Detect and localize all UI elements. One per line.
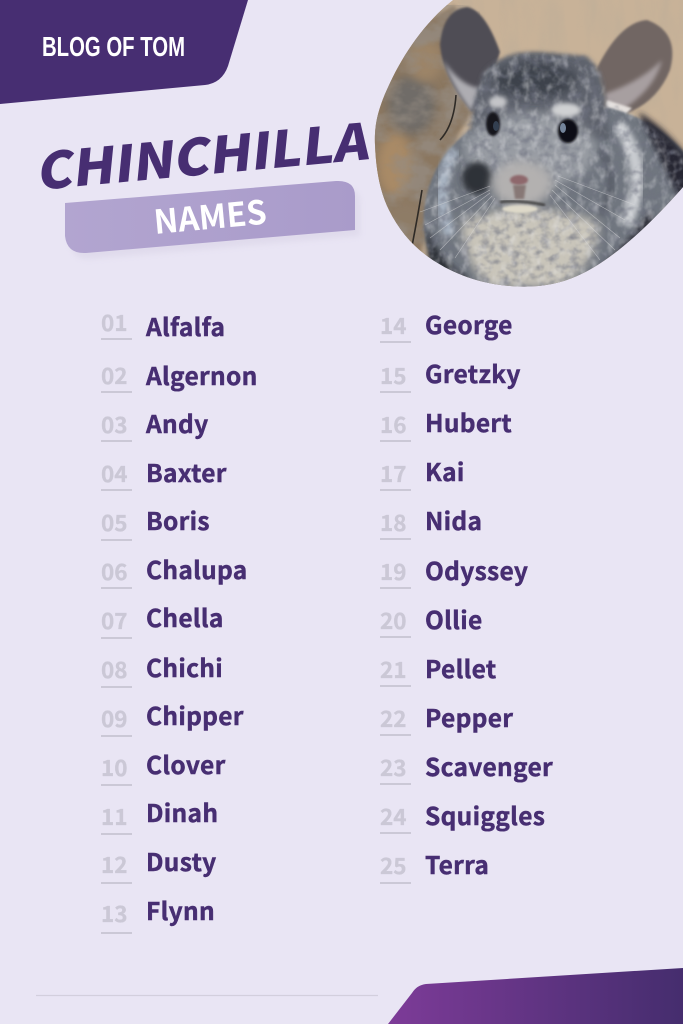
row 15: 15 — [380, 359, 407, 391]
row 12 — [101, 844, 217, 883]
shoulder shadows — [638, 112, 683, 205]
rock on left — [374, 4, 472, 253]
row 10: 10 — [101, 751, 128, 783]
row 07: 07 — [101, 604, 128, 636]
row 13: 13 — [101, 897, 128, 929]
row 04 — [101, 455, 227, 490]
nose and mouth — [500, 175, 545, 213]
row 12: Dusty — [146, 844, 217, 879]
row 11: 11 — [101, 800, 128, 832]
cheek rings — [618, 125, 637, 225]
row 03: Andy — [145, 406, 208, 441]
row 21: Pellet — [425, 651, 496, 686]
row 04: 04 — [101, 457, 128, 489]
row 18: 18 — [380, 506, 407, 538]
row 22 — [380, 700, 513, 735]
row 10 — [101, 747, 226, 785]
row 06: 06 — [101, 555, 128, 587]
row 02: 02 — [101, 359, 128, 391]
row 05: Boris — [146, 503, 210, 538]
row 17 — [380, 454, 465, 490]
row 24: 24 — [380, 800, 407, 832]
row 04: Baxter — [146, 455, 227, 490]
footer banner — [388, 968, 683, 1024]
row 13: Flynn — [146, 893, 215, 928]
row 19: Odyssey — [425, 553, 528, 588]
row 15 — [380, 356, 521, 392]
fur texture — [420, 50, 683, 290]
row 19 — [380, 553, 528, 588]
row 07: Chella — [146, 600, 224, 635]
row 09: Chipper — [146, 698, 244, 733]
eyes — [486, 112, 578, 143]
row 25: 25 — [380, 849, 407, 881]
row 20: Ollie — [425, 602, 482, 637]
body and head — [424, 52, 683, 292]
row 13 — [101, 893, 215, 933]
title: chinchilla: CHINCHILLA — [35, 100, 375, 205]
row 21: 21 — [380, 653, 407, 685]
row 03: 03 — [101, 408, 128, 440]
header banner — [0, 0, 248, 104]
names list: right column — [380, 307, 553, 883]
row 18 — [380, 503, 482, 539]
right ear — [597, 20, 672, 124]
subtitle text: NAMES — [151, 186, 268, 244]
face — [464, 112, 596, 188]
photo: chinchilla in blob frame — [370, 0, 683, 292]
row 23: Scavenger — [425, 749, 553, 784]
row 18: Nida — [425, 503, 482, 538]
row 24: Squiggles — [425, 798, 545, 833]
row 16 — [380, 405, 512, 441]
row 16: Hubert — [425, 405, 512, 440]
row 03 — [101, 406, 208, 441]
row 22: Pepper — [425, 700, 513, 735]
cheek patch — [462, 162, 492, 194]
row 16: 16 — [380, 408, 407, 440]
row 10: Clover — [146, 747, 226, 782]
row 05: 05 — [101, 506, 128, 538]
row 20: 20 — [380, 604, 407, 636]
row 21 — [380, 651, 496, 686]
row 11: Dinah — [146, 795, 218, 830]
row 17: 17 — [380, 457, 407, 489]
row 17: Kai — [425, 454, 465, 489]
row 12: 12 — [101, 848, 128, 880]
row 25 — [380, 847, 489, 883]
row 07 — [101, 600, 224, 638]
row 06: Chalupa — [146, 552, 248, 587]
row 19: 19 — [380, 555, 407, 587]
row 02: Algernon — [145, 358, 258, 393]
row 08 — [101, 650, 223, 687]
row 09: 09 — [101, 702, 128, 734]
row 25: Terra — [425, 847, 489, 882]
row 11 — [101, 795, 218, 834]
row 20 — [380, 602, 482, 637]
row 23: 23 — [380, 751, 407, 783]
row 05 — [101, 503, 210, 540]
names list: left column — [101, 306, 258, 933]
chest — [462, 208, 598, 287]
left ear — [440, 7, 500, 112]
row 15: Gretzky — [425, 356, 521, 391]
row 01 — [101, 306, 225, 344]
brand name: BLOG OF TOM — [42, 31, 185, 62]
wood backdrop — [370, 0, 683, 290]
row 14 — [380, 307, 513, 342]
row 14: 14 — [380, 309, 407, 341]
whiskers — [420, 176, 635, 260]
row 01: Alfalfa — [145, 309, 225, 344]
row 08: 08 — [101, 653, 128, 685]
row 09 — [101, 698, 244, 736]
brows — [489, 96, 507, 108]
row 08: Chichi — [146, 650, 223, 685]
row 14: George — [425, 307, 513, 342]
muzzle — [492, 161, 552, 207]
row 06 — [101, 552, 248, 588]
row 01: 01 — [101, 306, 128, 338]
row 22: 22 — [380, 702, 407, 734]
subtitle ribbon: names — [65, 181, 360, 259]
